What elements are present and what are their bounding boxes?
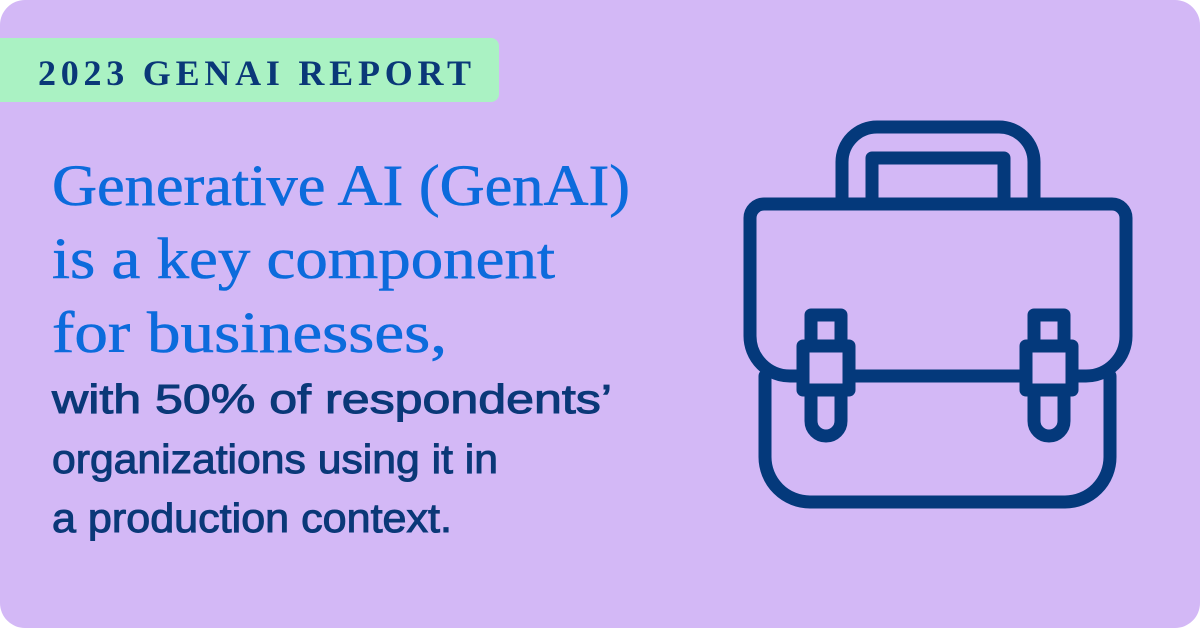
inner handle	[872, 158, 1004, 200]
flap	[750, 204, 1126, 376]
heading: for businesses,	[52, 300, 447, 365]
subtext: with 50% of respondents’	[51, 376, 612, 422]
icon: briefcase	[750, 127, 1126, 502]
outer handle	[842, 127, 1034, 200]
heading	[52, 153, 630, 365]
badge: 2023 GENAI REPORT	[0, 38, 499, 102]
badge: 2023 GENAI REPORT: 2023 GENAI REPORT	[38, 53, 471, 93]
subtext	[51, 376, 612, 541]
right clasp	[1026, 315, 1072, 436]
subtext: organizations using it in	[52, 436, 498, 482]
heading: Generative AI (GenAI)	[52, 153, 630, 218]
subtext: a production context.	[52, 495, 452, 541]
heading: is a key component	[52, 226, 555, 291]
lower body	[765, 376, 1110, 502]
left clasp	[803, 315, 849, 436]
